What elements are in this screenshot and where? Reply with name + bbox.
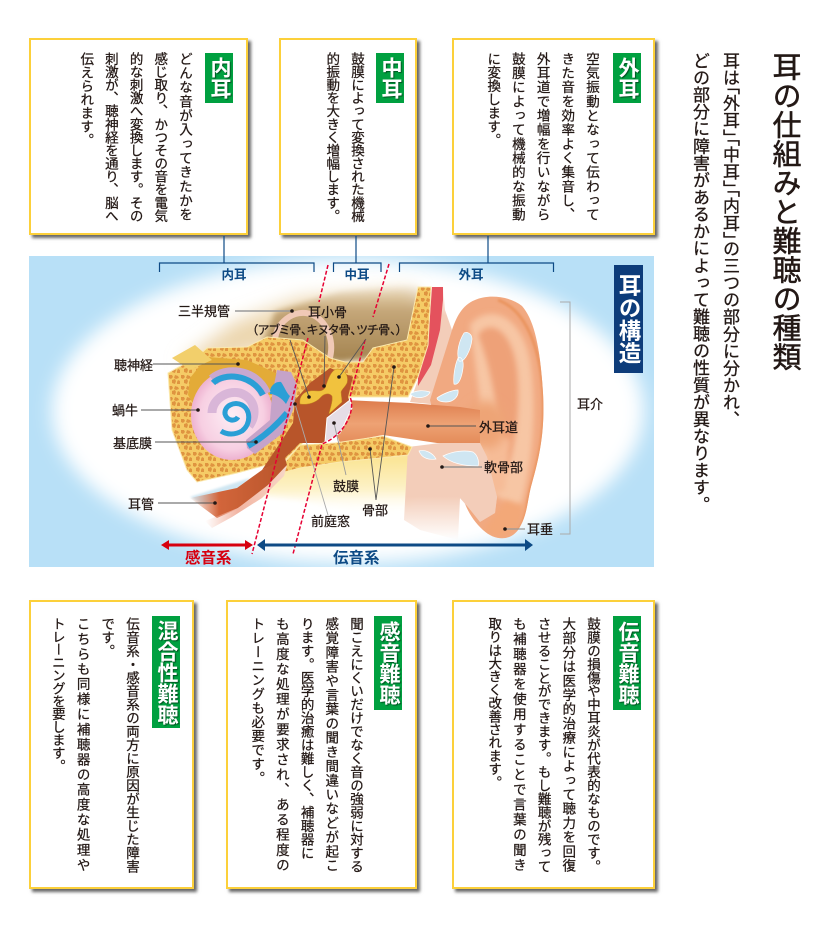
ear structure diagram <box>29 236 654 567</box>
ear anatomy illustration <box>168 284 550 545</box>
middle ear cavity <box>262 368 353 470</box>
bracket labels: 外耳 <box>458 267 484 282</box>
part labels: 蝸牛 <box>112 403 138 418</box>
text: sensorineural hearing loss: トレーニングも必要です。 <box>249 617 264 785</box>
heading: mixed hearing loss: 混合性難聴 <box>155 620 178 724</box>
text: conductive hearing loss: 取りは大きく改善されます。 <box>486 617 501 789</box>
text: outer ear <box>485 52 600 222</box>
part labels: （アブミ骨、キヌタ骨、ツチ骨、） <box>252 322 402 337</box>
text: conductive hearing loss: させることができます。もし難聴が残って <box>536 617 551 873</box>
title: 耳の仕組みと難聴の種類 <box>768 52 800 371</box>
text: mixed hearing loss: です。 <box>99 617 114 658</box>
arrow: conductive system <box>257 539 533 551</box>
part labels: 聴神経 <box>114 358 153 373</box>
text: sensorineural hearing loss: も高度な処理が要求され、ある程度の <box>274 617 289 873</box>
eustachian tube <box>190 458 287 518</box>
boundary lines: dashed red <box>252 264 389 554</box>
heading: outer ear: 外耳 <box>616 57 639 99</box>
panel: middle ear card <box>279 38 417 235</box>
part labels: 耳管 <box>128 497 154 512</box>
heading: middle ear: 中耳 <box>379 57 402 99</box>
text: inner ear: 伝えられます。 <box>78 52 93 146</box>
leader lines <box>141 311 525 529</box>
text: conductive hearing loss: も補聴器を使用することで言葉の聞き <box>511 617 526 873</box>
text: inner ear: 刺激が、聴神経を通り、脳へ <box>103 52 118 222</box>
bracket labels: 中耳 <box>344 267 370 282</box>
bracket labels: 内耳 <box>221 267 247 282</box>
text: sensorineural hearing loss: ります。医学的治癒は難しく、補聴器に <box>299 617 314 859</box>
leader dots <box>196 309 507 531</box>
arrow: sensorineural system <box>161 540 253 550</box>
panel: inner ear card <box>29 38 248 235</box>
panel background <box>29 256 654 567</box>
text: conductive hearing loss: 鼓膜の損傷や中耳炎が代表的なものです。 <box>585 617 600 873</box>
part labels: 鼓膜 <box>333 479 359 494</box>
auricle bracket <box>560 302 570 534</box>
text: mixed hearing loss <box>50 617 140 873</box>
intro text <box>690 52 740 513</box>
heading: outer ear <box>613 53 641 103</box>
text: outer ear: 外耳道で増幅を行いながら <box>535 52 550 222</box>
label: sensorineural: 感音系 <box>185 548 232 567</box>
text: inner ear: どんな音が入ってきたかを <box>177 52 192 222</box>
part labels: 三半規管 <box>178 304 230 319</box>
label: conductive: 伝音系 <box>333 549 380 567</box>
panel: outer ear card <box>452 38 655 235</box>
part labels: 耳小骨 <box>308 305 347 320</box>
text: middle ear <box>324 52 365 222</box>
part labels: 外耳道 <box>479 420 518 435</box>
part labels: 前庭窓 <box>311 514 350 529</box>
text: middle ear: 的振動を大きく増幅します。 <box>324 52 339 222</box>
heading: sensorineural hearing loss: 感音難聴 <box>377 621 400 705</box>
text: mixed hearing loss: こちらも同様に補聴器の高度な処理や <box>75 617 90 873</box>
text: conductive hearing loss: 大部分は医学的治療によって聴力を回復 <box>560 617 575 873</box>
text: outer ear: に変換します。 <box>485 52 500 146</box>
text: outer ear: 鼓膜によって機械的な振動 <box>510 52 525 222</box>
heading: ear structure: 耳の構造 <box>616 274 641 364</box>
part labels: 骨部 <box>362 503 388 518</box>
text: inner ear: 感じ取り、かつその音を電気 <box>152 52 167 222</box>
panel: conductive hearing loss <box>452 600 655 889</box>
bracket labels <box>221 267 484 282</box>
text: middle ear: 鼓膜によって変換された機械 <box>349 52 364 222</box>
text: conductive hearing loss <box>486 617 601 873</box>
brackets: inner, middle, outer ear <box>160 236 554 272</box>
panel: mixed hearing loss <box>29 600 194 889</box>
intro text: どの部分に障害があるかによって難聴の性質が異なります。 <box>690 52 709 513</box>
text: inner ear: 的な刺激へ変換します。その <box>128 52 143 222</box>
heading: inner ear <box>205 53 233 103</box>
part labels: 耳垂 <box>527 522 553 537</box>
auricle <box>430 296 544 538</box>
text: mixed hearing loss: トレーニングを要します。 <box>50 617 65 772</box>
heading: inner ear: 内耳 <box>208 57 231 99</box>
heading: middle ear <box>376 53 404 103</box>
part labels <box>112 304 603 537</box>
eardrum <box>325 400 352 442</box>
part labels: 耳介 <box>577 397 603 412</box>
text: mixed hearing loss: 伝音系・感音系の両方に原因が生じた障害 <box>124 617 139 873</box>
ossicles <box>300 369 348 414</box>
text: outer ear: きた音を効率よく集音し、 <box>559 52 574 222</box>
part labels: 基底膜 <box>113 436 152 451</box>
intro text: 耳は 「 外耳 」「 中耳 」「 内耳 」 の三つの部分に分かれ、 <box>720 52 739 428</box>
text: inner ear <box>78 52 192 222</box>
text: sensorineural hearing loss <box>249 617 364 873</box>
part labels: 軟骨部 <box>484 460 523 475</box>
heading: conductive hearing loss: 伝音難聴 <box>616 621 639 705</box>
cochlea <box>191 370 273 460</box>
text: sensorineural hearing loss: 聞こえにくいだけでなく音の強弱に対する <box>348 617 363 873</box>
text: outer ear: 空気振動となって伝わって <box>584 52 599 222</box>
panel: sensorineural hearing loss <box>226 600 417 889</box>
text: sensorineural hearing loss: 感覚障害や言葉の聞き間違いなどが起こ <box>323 617 338 873</box>
